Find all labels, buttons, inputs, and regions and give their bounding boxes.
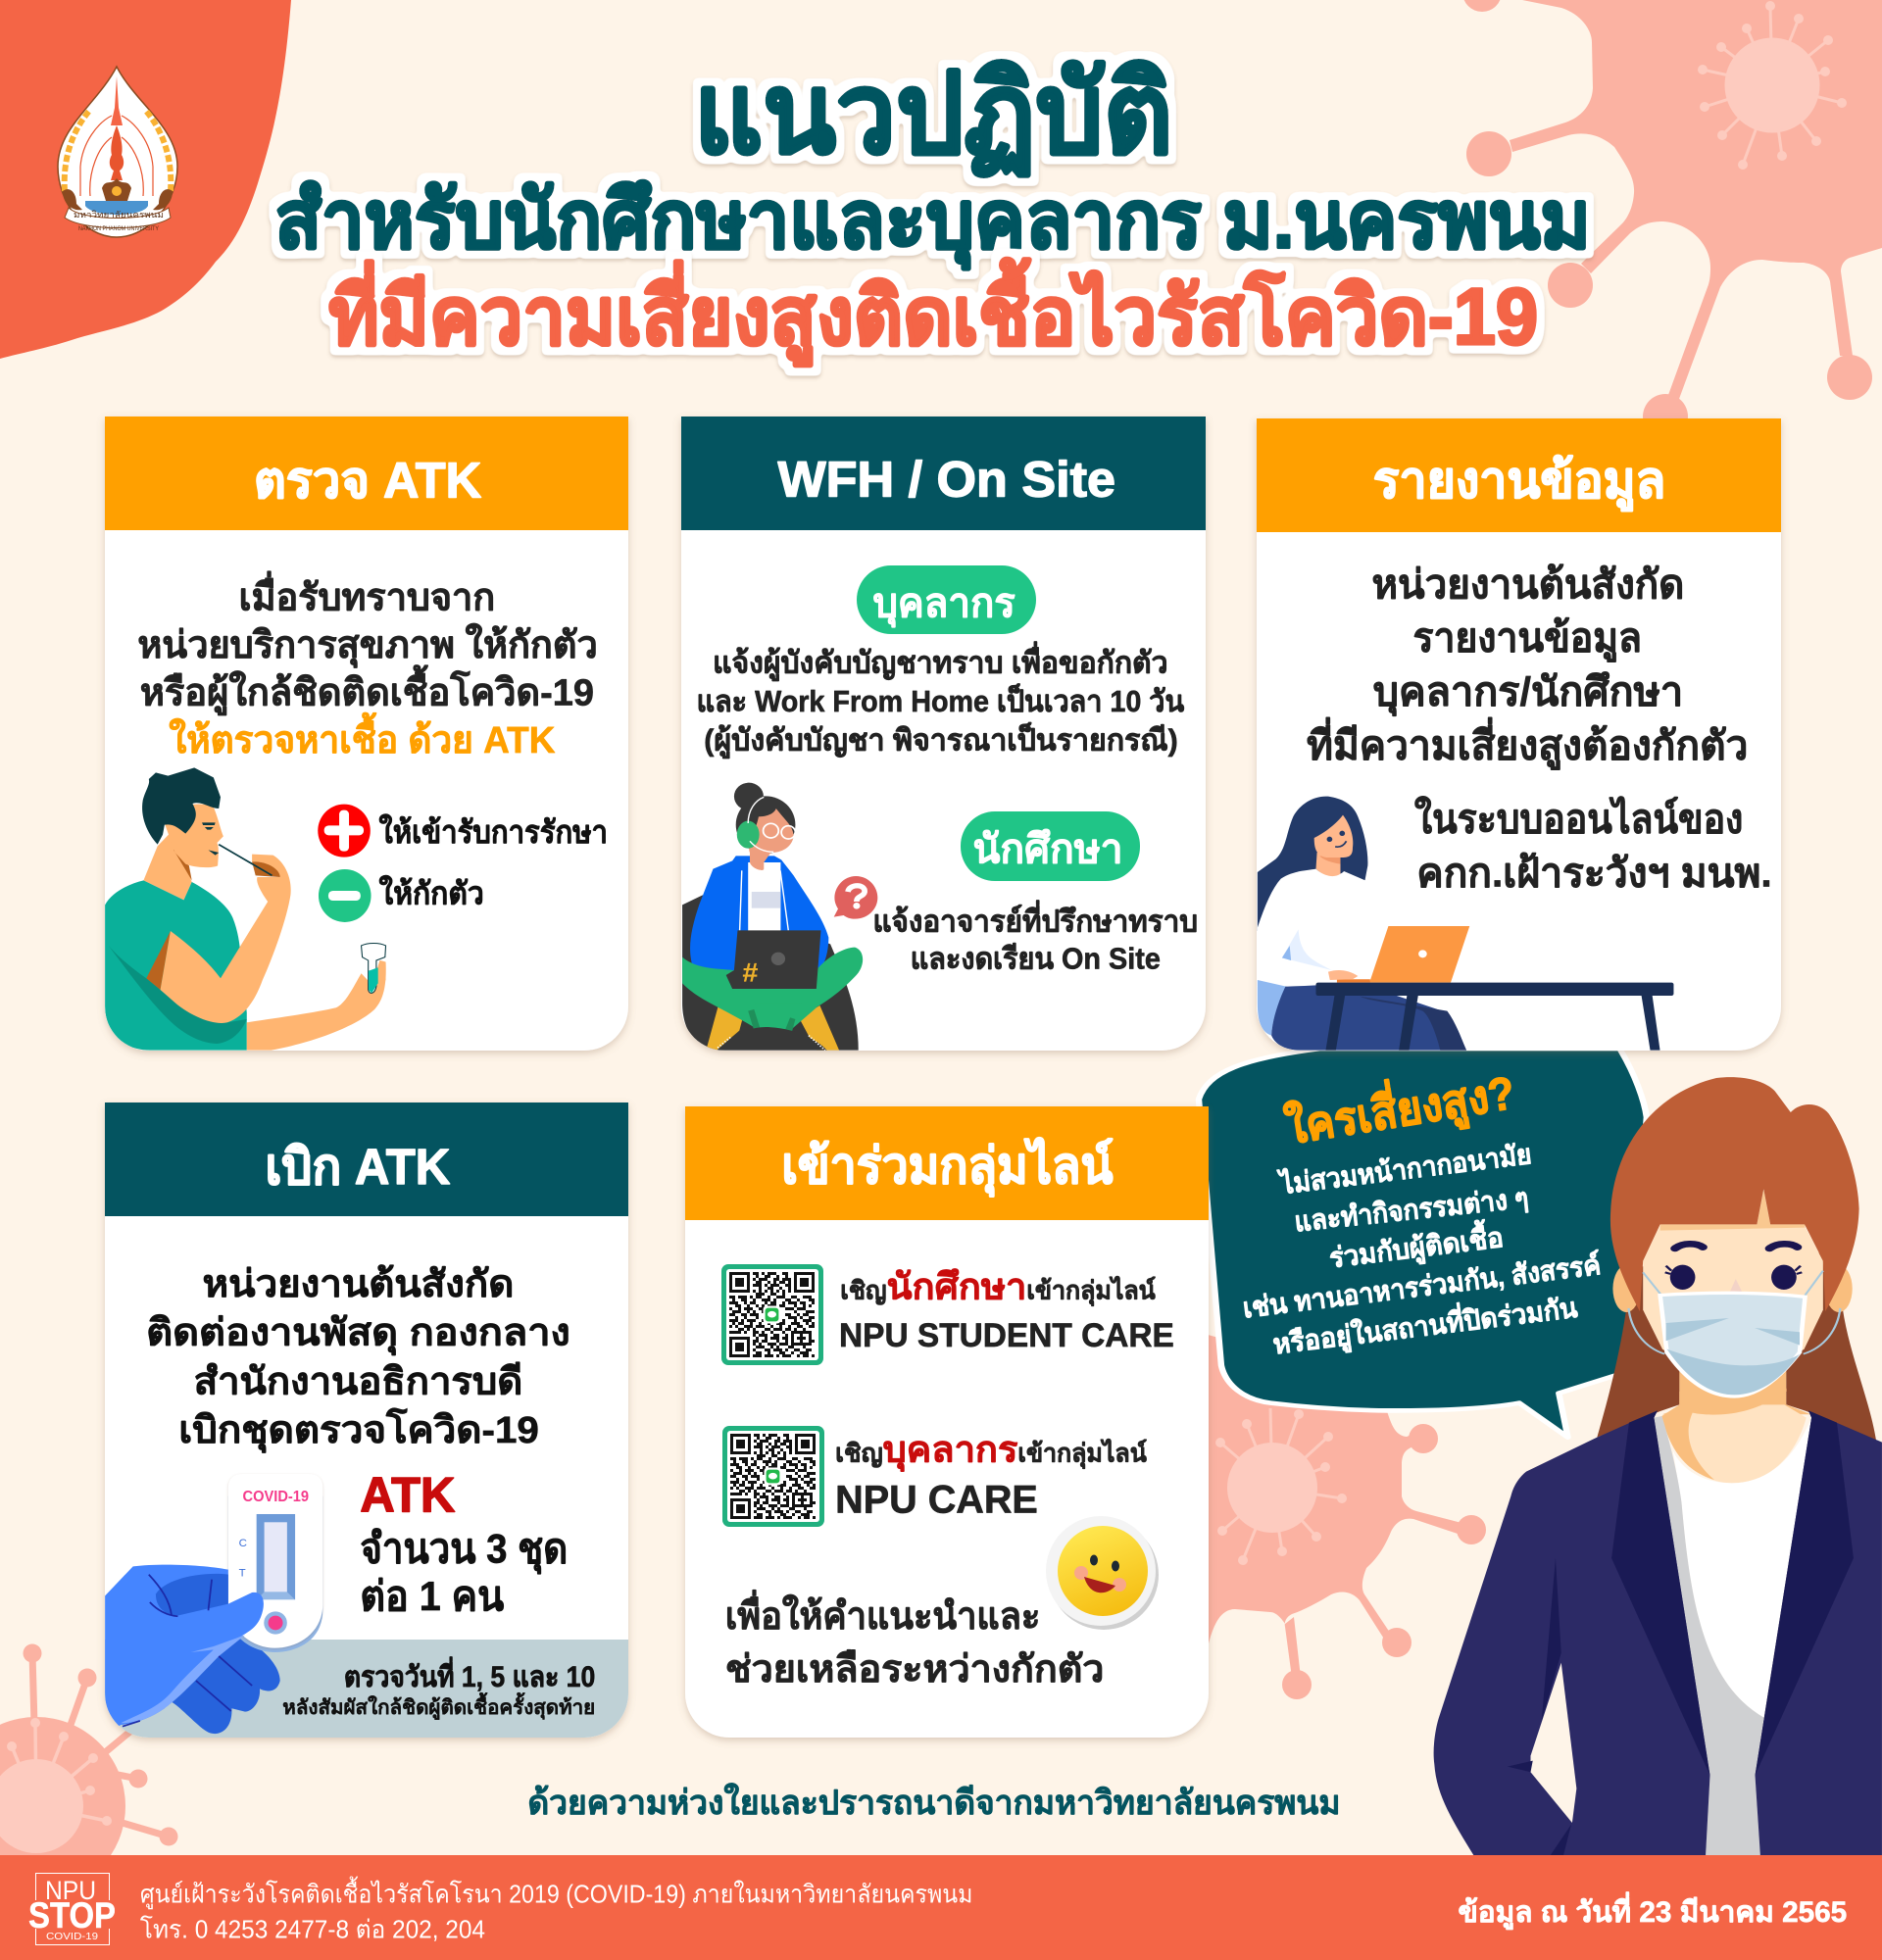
panel text: ATK pickup: ตรวจวันที่ 1, 5 และ 10 bbox=[344, 1656, 595, 1693]
pill: students bbox=[961, 811, 1140, 881]
title block bbox=[275, 52, 1591, 367]
panel: ATK pickup bbox=[105, 1102, 628, 1738]
illustration: woman with laptop and headset bbox=[682, 783, 863, 1051]
icon: red plus bbox=[318, 805, 371, 858]
icon: smiley bbox=[1046, 1516, 1159, 1630]
title block: แนวปฏิบัติ bbox=[694, 52, 1173, 178]
footer text bbox=[140, 1877, 1847, 1943]
illustration: hand with test kit bbox=[105, 1474, 322, 1734]
panel text: WFH / On Site: WFH / On Site bbox=[777, 451, 1115, 507]
panel text: ATK pickup: สำนักงานอธิการบดี bbox=[194, 1360, 522, 1402]
title block: ที่มีความเสี่ยงสูงติดเชื้อไวรัสโควิด-19 bbox=[329, 258, 1538, 367]
panel text: LINE group bbox=[725, 1137, 1174, 1690]
panel text: ATK pickup: ติดต่องานพัสดุ กองกลาง bbox=[146, 1312, 570, 1356]
footer logo: NPU STOP bbox=[27, 1874, 118, 1944]
panel text: LINE group: เชิญ bbox=[840, 1277, 886, 1304]
panel text: WFH / On Site bbox=[697, 451, 1198, 976]
panel text: report data: คกก.เฝ้าระวังฯ มนพ. bbox=[1416, 850, 1772, 895]
panel text: LINE group: NPU STUDENT CARE bbox=[839, 1317, 1174, 1354]
top-left orange shape bbox=[0, 0, 291, 359]
panel text: WFH / On Site: แจ้งอาจารย์ที่ปรึกษาทราบ bbox=[872, 900, 1198, 938]
panel text: LINE group: เพื่อให้คำแนะนำและ bbox=[725, 1590, 1040, 1638]
panel text: ATK pickup: COVID-19 bbox=[242, 1489, 309, 1505]
panel text: ATK test bbox=[137, 453, 608, 910]
panel text: LINE group: ช่วยเหลือระหว่างกักตัว bbox=[725, 1648, 1104, 1690]
panel text: ATK pickup: จำนวน 3 ชุด bbox=[360, 1526, 568, 1575]
speech bubble shape bbox=[1199, 1049, 1647, 1438]
panel text: ATK pickup: T bbox=[239, 1568, 246, 1580]
virus: bottom left bbox=[0, 1644, 178, 1855]
bubble text: who is high risk: ใครเสี่ยงสูง? bbox=[1280, 1059, 1518, 1157]
panel text: ATK pickup: หลังสัมผัสใกล้ชิดผู้ติดเชื้อครั้งสุดท้าย bbox=[282, 1691, 595, 1721]
panel text: WFH / On Site: และ Work From Home เป็นเวลา 10 วัน bbox=[697, 683, 1184, 718]
footer text: ศูนย์เฝ้าระวังโรคติดเชื้อไวรัสโคโรนา 2019 (COVID-19) ภายในมหาวิทยาลัยนครพนม bbox=[140, 1877, 972, 1910]
bubble text: who is high risk: ไม่สวมหน้ากากอนามัย bbox=[1276, 1138, 1533, 1200]
footer bar bbox=[0, 1855, 1882, 1960]
bubble text: who is high risk bbox=[1241, 1059, 1603, 1362]
panel text: ATK test: ให้เข้ารับการรักษา bbox=[379, 813, 608, 850]
icon: hash sticker: # bbox=[742, 958, 758, 987]
illustration: man swabbing nose bbox=[105, 767, 386, 1051]
bubble text: who is high risk: และทำกิจกรรมต่าง ๆ bbox=[1293, 1183, 1530, 1238]
panel text: ATK test: ตรวจ ATK bbox=[254, 453, 481, 509]
panel text: ATK test: หน่วยบริการสุขภาพ ให้กักตัว bbox=[137, 622, 598, 668]
panel text: report data: บุคลากร/นักศึกษา bbox=[1373, 668, 1683, 716]
panel text: ATK test: หรือผู้ใกล้ชิดติดเชื้อโควิด-19 bbox=[140, 664, 594, 715]
panel: WFH / On Site bbox=[681, 416, 1206, 1051]
panel: ATK test bbox=[105, 416, 628, 1051]
illustration: woman with mask bbox=[1434, 1077, 1882, 1855]
panel text: LINE group: เข้ากลุ่มไลน์ bbox=[1026, 1275, 1156, 1306]
panel text: ATK pickup: ต่อ 1 คน bbox=[360, 1573, 504, 1619]
panel text: ATK pickup bbox=[146, 1139, 595, 1721]
footer logo: NPU STOP: NPU bbox=[45, 1876, 96, 1905]
panel text: WFH / On Site: นักศึกษา bbox=[972, 826, 1123, 871]
grey strip bbox=[105, 1640, 628, 1738]
panel text: LINE group: บุคลากร bbox=[883, 1429, 1018, 1472]
panel text: report data: รายงานข้อมูล bbox=[1413, 615, 1642, 663]
university logo: มหาวิทยาลัยนครพนม bbox=[74, 210, 164, 220]
panel text: ATK test: ให้ตรวจหาเชื้อ ด้วย ATK bbox=[169, 712, 556, 761]
panel text: ATK pickup: เบิกชุดตรวจโควิด-19 bbox=[178, 1407, 539, 1453]
panel text: report data: หน่วยงานต้นสังกัด bbox=[1371, 562, 1684, 607]
bubble text: who is high risk: ร่วมกับผู้ติดเชื้อ bbox=[1327, 1216, 1506, 1276]
QR code: personnel bbox=[722, 1426, 824, 1527]
virus: behind speech bubble bbox=[1201, 1333, 1486, 1699]
icon: question bubble bbox=[834, 876, 877, 919]
panel text: LINE group: NPU CARE bbox=[835, 1479, 1038, 1522]
virus: top right bbox=[1462, 0, 1882, 439]
panel text: ATK test: เมื่อรับทราบจาก bbox=[239, 571, 495, 619]
footer logo: NPU STOP: COVID-19 bbox=[46, 1932, 99, 1942]
panel text: ATK pickup: เบิก ATK bbox=[265, 1139, 450, 1195]
panel text: LINE group: เข้ากลุ่มไลน์ bbox=[1017, 1438, 1147, 1469]
panel text: ATK test: ให้กักตัว bbox=[379, 874, 484, 910]
panel text: LINE group: เชิญ bbox=[835, 1440, 883, 1467]
pill: personnel bbox=[857, 565, 1036, 634]
panel text: WFH / On Site: บุคลากร bbox=[872, 580, 1015, 628]
panel: LINE group bbox=[685, 1106, 1209, 1738]
university logo: NAKHON PHANOM UNIVERSITY bbox=[78, 226, 159, 232]
QR code: students bbox=[721, 1264, 823, 1365]
panel text: report data: ในระบบออนไลน์ของ bbox=[1414, 796, 1743, 842]
icon: green minus bbox=[319, 869, 371, 922]
panel text: report data bbox=[1307, 453, 1772, 895]
panel text: ATK pickup: หน่วยงานต้นสังกัด bbox=[203, 1263, 514, 1305]
panel text: WFH / On Site: และงดเรียน On Site bbox=[911, 943, 1161, 976]
panel text: ATK pickup: C bbox=[239, 1538, 247, 1549]
panel text: ATK pickup: ATK bbox=[360, 1467, 455, 1522]
panel: report data bbox=[1257, 418, 1781, 1051]
footer text: ข้อมูล ณ วันที่ 23 มีนาคม 2565 bbox=[1458, 1891, 1847, 1930]
title block: สำหรับนักศึกษาและบุคลากร ม.นครพนม bbox=[275, 176, 1591, 270]
bubble text: who is high risk: หรืออยู่ในสถานที่ปิดร่วมกัน bbox=[1270, 1288, 1579, 1362]
panel text: report data: ที่มีความเสี่ยงสูงต้องกักตัว bbox=[1307, 716, 1748, 770]
university logo bbox=[58, 67, 177, 237]
panel text: WFH / On Site: (ผู้บังคับบัญชา พิจารณาเป็นรายกรณี) bbox=[704, 721, 1178, 759]
footer text: โทร. 0 4253 2477-8 ต่อ 202, 204 bbox=[140, 1915, 485, 1943]
footer logo: NPU STOP: STOP bbox=[28, 1895, 116, 1936]
panel text: LINE group: นักศึกษา bbox=[886, 1266, 1026, 1306]
panel text: report data: รายงานข้อมูล bbox=[1373, 453, 1665, 513]
panel text: WFH / On Site: แจ้งผู้บังคับบัญชาทราบ เพื่อขอกักตัว bbox=[713, 641, 1168, 681]
panel text: LINE group: เข้าร่วมกลุ่มไลน์ bbox=[781, 1137, 1114, 1198]
closing message: ด้วยความห่วงใยและปรารถนาดีจากมหาวิทยาลัยนครพนม bbox=[527, 1783, 1341, 1822]
illustration: woman at desk bbox=[1258, 797, 1673, 1051]
bubble text: who is high risk: เช่น ทานอาหารร่วมกัน, สังสรรค์ bbox=[1241, 1250, 1603, 1324]
